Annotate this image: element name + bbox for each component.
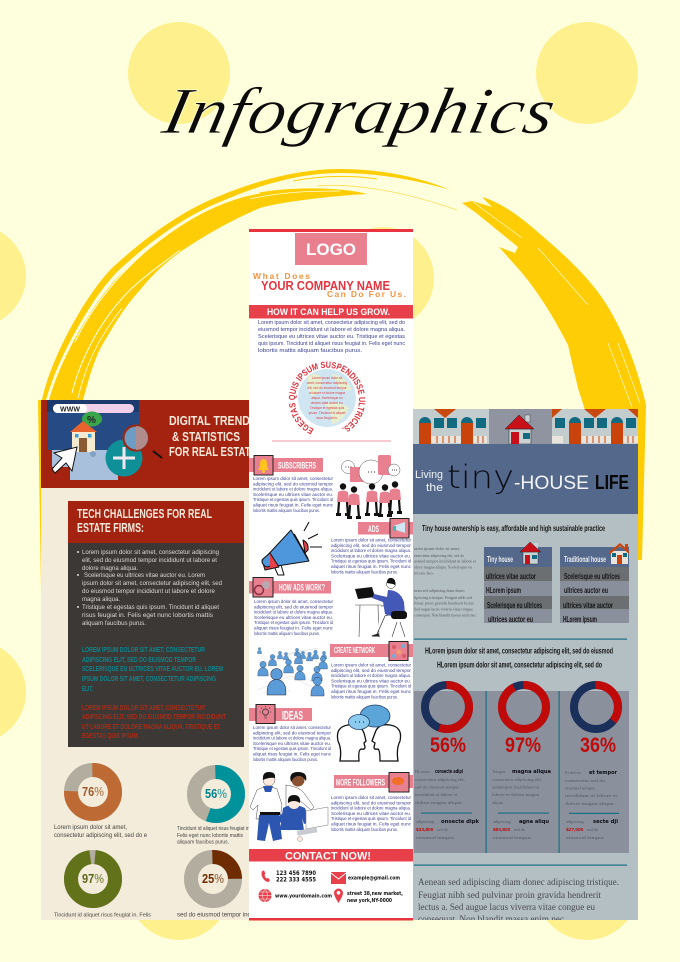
bullet list: aliquam faucibus purus. xyxy=(82,621,146,627)
globe badge: Lorem ipsum dolor sit xyxy=(312,376,342,380)
red text: UT LABORE ET DOLORE MAGNA ALIQUA. TRISTIQUE ET xyxy=(82,724,221,731)
icon: traditional house xyxy=(609,543,629,564)
globe badge: risus feugiat in. xyxy=(316,416,338,420)
globe badge: Tristique et egestas quis xyxy=(310,406,345,410)
column: 97%: consectetur adipiscing elit, xyxy=(492,777,542,783)
tech challenges box xyxy=(68,501,244,747)
table: tiny house: HLorem ipsum xyxy=(486,586,521,595)
section: subscribers: SUBSCRIBERS xyxy=(278,460,316,470)
section: more followers xyxy=(250,772,413,842)
paragraph: aliquet risus feugiat in. Felis eget nunc xyxy=(254,626,334,630)
column: 36%: $27,000 xyxy=(566,827,584,833)
side paragraph: lipiscing tristique. Feugiat nibh sed xyxy=(414,595,473,600)
paragraph: incididunt ut labore et dolore magna aliqua. xyxy=(253,487,333,492)
paragraph: lobortis mattis aliquam faucibus purus. xyxy=(331,569,398,574)
section: create network: CREATE NETWORK xyxy=(334,646,375,655)
bullet list: dolore magna aliqua. xyxy=(82,566,138,572)
teal text: SCELERISQUE EU ULTRICES VITAE AUCTOR EU. LOREM xyxy=(82,666,223,673)
globe badge: amet, consectetur adipiscing xyxy=(307,381,347,385)
column: 36%: sed do xyxy=(587,827,598,832)
centered statement: HLorem ipsum dolor sit amet, consectetur adipiscing elit, sed do xyxy=(437,660,602,670)
contact: phone xyxy=(262,869,316,884)
section: ads: ADS xyxy=(368,524,379,534)
paragraph: aliquet risus feugiat in. Felis eget nunc xyxy=(253,752,332,756)
caption 97%: Tincidunt id aliquet risus feugiat in. Felis xyxy=(54,912,151,918)
paragraph: adipiscing elit, sed do eiusmod tempor xyxy=(254,604,333,609)
paragraph: Lorem ipsum dolor sit amet, consectetur xyxy=(253,476,333,481)
icon: bell xyxy=(254,456,273,475)
table: tiny house: Scelerisque eu ultrices xyxy=(487,601,542,610)
grow band: HOW IT CAN HELP US GROW. xyxy=(267,307,390,318)
contact: email xyxy=(331,872,400,884)
column: 56% xyxy=(415,685,480,840)
paragraph: Tristique et egestas quis ipsum. Tincidunt id xyxy=(331,684,411,689)
heading: What Does xyxy=(253,271,310,281)
column: 97%: Tempor xyxy=(492,769,506,774)
donut 76% xyxy=(71,770,115,814)
table: tiny house: Tiny house xyxy=(487,554,513,564)
bullet list: Tristique et egestas quis ipsum. Tincidunt id aliquet xyxy=(82,605,219,611)
section: ideas: IDEAS xyxy=(282,708,303,722)
column: 97%: sed do xyxy=(514,827,525,832)
side paragraph: nean sed adipiscing diam donec xyxy=(414,588,465,593)
paragraph: adipiscing elit, sed do eiusmod tempor xyxy=(331,543,411,548)
paragraph xyxy=(331,662,412,699)
intro paragraph: eiusmod tempor incididunt ut labore et dolore magna aliqua. xyxy=(258,327,405,333)
grow band xyxy=(249,305,413,318)
paragraph: aliquet risus feugiat in. Felis eget nunc xyxy=(253,502,334,508)
column: 97%: adipiscing xyxy=(493,819,512,824)
paragraph: incididunt ut labore et dolore magna aliqua. xyxy=(253,736,331,741)
table: traditional house xyxy=(560,543,629,624)
paragraph: Tristique et egestas quis ipsum. Tincidunt id xyxy=(331,816,411,821)
heading: Can Do For Us. xyxy=(327,289,406,299)
header banner xyxy=(41,400,257,488)
table: tiny house xyxy=(484,542,552,624)
contact band: CONTACT NOW! xyxy=(285,850,371,862)
intro paragraph: Lorem ipsum dolor sit amet, consectetur adipiscing elit, sed do xyxy=(258,320,405,326)
teal text: ADIPISCING ELIT, SED DO EIUSMOD TEMPOR xyxy=(82,657,196,664)
paragraph xyxy=(253,476,334,513)
column: 36%: Et dolore xyxy=(565,770,581,775)
contact: email: example@gmail.com xyxy=(348,876,400,882)
column: 97%: labore et dolore magna xyxy=(492,792,539,797)
paragraph: Scelerisque eu ultrices vitae auctor eu. xyxy=(253,492,333,497)
section: subscribers xyxy=(249,455,402,519)
panel: real estate infographic xyxy=(41,400,257,920)
icon: chat xyxy=(389,772,409,792)
globe badge: ut labore et dolore magna xyxy=(309,391,345,395)
header banner: % xyxy=(87,415,96,426)
column: 97%: eiusmod tempor. xyxy=(493,835,532,840)
side paragraph: orem ipsum dolor sit amet, xyxy=(414,546,460,552)
icon: cursor xyxy=(52,447,77,473)
column: 56%: eiusmod tempor. xyxy=(416,835,455,840)
icon: plus circle xyxy=(106,440,142,476)
bullet list xyxy=(77,550,222,627)
paragraph xyxy=(331,795,412,832)
paragraph: Lorem ipsum dolor sit amet, consectetur xyxy=(253,725,331,730)
title banner xyxy=(413,444,638,514)
icon: magnifier xyxy=(124,426,162,458)
teal text: LOREM IPSUM DOLOR SIT AMET, CONSECTETUR xyxy=(82,647,205,654)
paragraph: aliquet risus feugiat in. Felis eget nunc xyxy=(331,564,412,569)
caption 76%: Lorem ipsum dolor sit amet, xyxy=(54,824,127,831)
closing paragraph: Feugiat nibh sed pulvinar proin gravida hendrerit xyxy=(418,891,601,901)
caption 56%: Tincidunt id aliquet risus feugiat in. xyxy=(177,826,251,832)
paragraph xyxy=(254,599,334,636)
bullet list: Scelerisque eu ultrices vitae auctor eu. Lorem xyxy=(84,573,205,579)
column: 56%: consecte adipi xyxy=(435,769,463,775)
side paragraph: consequat. Non blandit massa enim nec xyxy=(414,612,476,618)
paragraph: Lorem ipsum dolor sit amet, consectetur xyxy=(254,599,333,604)
column: 36%: eiusmod tempor. xyxy=(566,835,605,840)
bullet list: Lorem ipsum dolor sit amet, consectetur adipiscing xyxy=(82,550,219,556)
section: how ads work xyxy=(249,578,407,637)
teal text xyxy=(82,647,223,693)
paragraph: lobortis mattis aliquam faucibus purus. xyxy=(253,508,320,513)
heading xyxy=(253,271,406,299)
paragraph: aliquet risus feugiat in. Felis eget nunc xyxy=(331,689,412,694)
column: 97%: agna aliqu xyxy=(519,819,549,825)
paragraph: lobortis mattis aliquam faucibus purus. xyxy=(331,827,398,832)
red text: LOREM IPSUM DOLOR SIT AMET, CONSECTETUR xyxy=(82,705,205,712)
column: 97%: 97% xyxy=(505,734,541,757)
column: 56%: incididunt ut labore et xyxy=(415,792,458,797)
column: 56%: HLorem xyxy=(415,769,430,774)
column: 36%: adipiscing xyxy=(566,819,585,824)
table: tiny house: ultrices auctor eu xyxy=(488,615,533,624)
side paragraph: . xyxy=(414,618,415,623)
red text: ADIPISCING ELIT, SED DO EIUSMOD TEMPOR INCIDIDUNT xyxy=(82,714,227,721)
illustration: people network xyxy=(257,647,328,696)
logo box: LOGO xyxy=(306,240,356,259)
donut 56% xyxy=(194,772,238,816)
logo box xyxy=(295,233,367,265)
column: 97%: sedtempor incididunt ut xyxy=(492,784,540,790)
paragraph: Tristique et egestas quis ipsum. Tincidunt id xyxy=(253,746,331,751)
contact: phone: 123 456 7890 xyxy=(276,869,316,877)
red text xyxy=(82,705,227,740)
globe badge: EGESTAS QUIS IPSUM SUSPENDISSE ULTRICES. xyxy=(288,362,366,434)
paragraph xyxy=(253,725,332,762)
header text: FOR REAL ESTATE xyxy=(169,444,257,459)
side paragraph: usmod tempor incididunt ut labore et xyxy=(414,558,477,564)
closing paragraph: lectus a. Sed augue lacus viverra vitae congue eu xyxy=(418,903,595,913)
header text: & STATISTICS xyxy=(172,429,240,444)
heading: YOUR COMPANY NAME xyxy=(261,279,390,293)
illustration: group talking xyxy=(336,455,402,519)
contact: address: new york,NY-0000 xyxy=(347,898,392,904)
section: ideas xyxy=(249,704,401,762)
house strip xyxy=(413,409,638,444)
header text: DIGITAL TRENDS xyxy=(169,413,257,428)
column: 56%: $33,800 xyxy=(416,827,434,833)
column: 56%: 56% xyxy=(430,734,466,757)
intro paragraph: Scelerisque eu ultrices vitae auctor eu. Tristique et egestas xyxy=(258,334,405,340)
red text: EGESTAS QUIS IPSUM. xyxy=(82,733,139,740)
contact: address xyxy=(334,888,403,904)
column: 56%: dolore magna aliqua. xyxy=(415,800,463,805)
paragraph: incididunt ut labore et dolore magna aliqua. xyxy=(331,673,411,678)
section: create network xyxy=(257,642,413,699)
column: 36%: dolore magna aliqua. xyxy=(565,801,615,806)
donut 56%: 56% xyxy=(205,787,227,801)
paragraph: lobortis mattis aliquam faucibus purus. xyxy=(331,694,398,699)
title banner: tiny xyxy=(447,458,514,496)
table: traditional house: HLorem ipsum xyxy=(563,615,597,624)
title banner: the xyxy=(426,482,443,494)
column: 97%: $83,800 xyxy=(493,827,511,833)
intro paragraph: lobortis mattis aliquam faucibus purus. xyxy=(258,348,362,354)
donut 76%: 76% xyxy=(82,785,104,799)
bullet list: do eiusmod tempor incididunt ut labore et dolore xyxy=(82,589,216,595)
donut 97%: 97% xyxy=(82,872,104,886)
column: 56%: sed do xyxy=(437,827,448,832)
paragraph: Lorem ipsum dolor sit amet, consectetur xyxy=(331,538,411,542)
contact: website: www.yourdomain.com xyxy=(275,894,332,900)
side paragraph: onsectetur adipiscing elit, sed do xyxy=(414,553,464,559)
box heading xyxy=(77,509,212,532)
caption 56%: aliquam faucibus purus. xyxy=(177,840,229,846)
paragraph: Scelerisque eu ultrices vitae auctor eu. xyxy=(253,741,331,746)
side paragraph: trices leo. xyxy=(414,570,434,576)
globe badge: aliqua. Scelerisque eu xyxy=(311,396,343,400)
closing paragraph xyxy=(418,878,618,920)
column: 36%: incididunt ut labore et xyxy=(565,793,618,798)
column: 56%: consectetur adipiscing elit, xyxy=(415,777,465,783)
caption 76% xyxy=(54,824,147,839)
donut 25% xyxy=(191,857,235,901)
contact band xyxy=(249,849,413,862)
closing paragraph: consequat. Non blandit massa enim nec xyxy=(418,915,564,925)
column: 56%: sed do eiusmod tempor xyxy=(415,784,460,790)
globe badge: ultrices vitae auctor eu. xyxy=(311,401,343,405)
icon: network xyxy=(389,642,408,660)
table: tiny house: ultrices vitae auctor xyxy=(486,572,536,581)
illustration: man at computer xyxy=(355,578,407,637)
illustration: megaphone xyxy=(262,522,322,575)
bullet list: ipsum dolor sit amet, consectetur adipiscing elit, sed xyxy=(82,581,222,587)
illustration: two heads xyxy=(337,705,401,761)
paragraph: incididunt ut labore et dolore magna aliqua. xyxy=(331,548,411,553)
section: ads xyxy=(262,518,413,575)
side paragraph xyxy=(414,546,477,623)
intro paragraph xyxy=(258,320,405,354)
column: 97%: aliqua. xyxy=(492,800,504,805)
column: 36%: consectetu sed do xyxy=(565,778,605,783)
icon: gears xyxy=(253,578,273,597)
column: 97% xyxy=(492,685,551,840)
paragraph: adipiscing elit, sed do eiusmod tempor xyxy=(331,668,411,673)
intro paragraph: quis ipsum. Tincidunt id aliquet risus feugiat in. Felis eget nunc xyxy=(258,341,405,347)
box heading: ESTATE FIRMS: xyxy=(77,521,144,535)
table: traditional house: Traditional house xyxy=(564,554,606,564)
table: traditional house: Scelerisque eu ultrices xyxy=(564,572,620,581)
paragraph xyxy=(331,538,412,574)
donut 97% xyxy=(71,857,115,901)
bullet list: elit, sed do eiusmod tempor incididunt ut labore et xyxy=(82,558,217,564)
column: 36%: secte dji xyxy=(593,819,618,825)
column: 56%: onsecte dipk xyxy=(441,819,480,825)
icon: megaphone small xyxy=(390,518,409,538)
column: 36% xyxy=(565,685,619,840)
centered statement xyxy=(425,646,613,670)
teal text: ELIT. xyxy=(82,686,93,693)
paragraph: aliquet risus feugiat in. Felis eget nunc xyxy=(331,822,412,826)
header text xyxy=(170,416,249,456)
table: traditional house: ultrices vitae auctor xyxy=(563,601,613,610)
column: 36%: et tempor xyxy=(589,770,617,776)
paragraph: Tristique et egestas quis ipsum. Tincidunt id xyxy=(253,497,333,502)
brush stroke ring xyxy=(38,169,646,590)
title: Infographics xyxy=(155,76,562,148)
icon: tiny house xyxy=(520,542,541,564)
panel: tiny house infographic xyxy=(413,409,638,920)
paragraph: adipiscing elit, sed do eiusmod tempor xyxy=(331,800,411,805)
title banner: LIFE xyxy=(595,472,629,494)
bullet list: magna aliqua. xyxy=(82,597,120,603)
table: traditional house: ultrices auctor eu xyxy=(564,586,608,595)
section: more followers: MORE FOLLOWERS xyxy=(336,778,385,788)
contact: address: street 38,new market, xyxy=(347,891,403,897)
caption 56%: Felis eget nunc lobortis mattis xyxy=(177,833,243,839)
paragraph: Lorem ipsum dolor sit amet, consectetur xyxy=(331,795,411,800)
paragraph: adipiscing elit, sed do eiusmod tempor xyxy=(253,730,331,735)
paragraph: Scelerisque eu ultrices vitae auctor eu. xyxy=(331,811,411,816)
side paragraph: Sed augue lacus viverra vitae congue xyxy=(414,606,473,612)
caption 76%: consectetur adipiscing elit, sed do e xyxy=(54,832,147,839)
column: 97%: magna aliqua xyxy=(512,769,551,775)
paragraph: Lorem ipsum dolor sit amet, consectetur xyxy=(331,662,411,668)
icon: light bulb xyxy=(256,704,275,724)
side paragraph: lvinar proin gravida hendrerit lectus xyxy=(414,600,474,606)
paragraph: Tristique et egestas quis ipsum. Tincidunt id xyxy=(331,559,411,564)
stat columns background xyxy=(414,691,629,853)
paragraph: lobortis mattis aliquam faucibus purus. xyxy=(253,757,318,762)
paragraph: Scelerisque eu ultrices vitae auctor eu. xyxy=(331,553,411,558)
side paragraph: olore magna aliqua. Scelerisque eu xyxy=(414,564,473,570)
caption 56% xyxy=(177,826,251,846)
column: 56%: adipiscing xyxy=(416,819,435,824)
paragraph: Scelerisque eu ultrices vitae auctor eu. xyxy=(254,615,333,620)
globe badge: elit, sed do eiusmod tempor xyxy=(307,386,348,390)
paragraph: Tristique et egestas quis ipsum. Tincidunt id xyxy=(254,620,333,625)
bullet list: risus feugiat in. Felis eget nunc lobortis mattis xyxy=(82,613,213,619)
donut 25%: 25% xyxy=(202,872,224,886)
column: 36%: eiusmod tempor xyxy=(565,786,596,790)
paragraph: incididunt ut labore et dolore magna aliqua. xyxy=(331,806,411,811)
column: 36%: 36% xyxy=(580,734,616,757)
illustration: three colleagues xyxy=(250,772,328,842)
box heading: TECH CHALLENGES FOR REAL xyxy=(77,507,212,521)
paragraph: Scelerisque eu ultrices vitae auctor eu. xyxy=(331,678,411,683)
header banner: WWW xyxy=(60,406,80,414)
paragraph: adipiscing elit, sed do eiusmod tempor xyxy=(253,481,333,486)
teal text: IPSUM DOLOR SIT AMET, CONSECTETUR ADIPISCING xyxy=(82,676,216,683)
caption 25%: sed do eiusmod tempor inci xyxy=(177,912,252,918)
contact: phone: 222 333 4555 xyxy=(276,876,316,884)
closing paragraph: Aenean sed adipiscing diam donec adipiscing tristique. xyxy=(418,878,619,888)
paragraph: incididunt ut labore et dolore magna aliqua. xyxy=(254,610,333,615)
globe badge: ipsum. Tincidunt id aliquet xyxy=(309,411,345,415)
title banner: -HOUSE xyxy=(514,473,589,494)
section: how ads work: HOW ADS WORK? xyxy=(279,582,325,592)
title banner: Living xyxy=(415,469,443,481)
contact: website xyxy=(258,889,332,902)
paragraph: lobortis mattis aliquam faucibus purus. xyxy=(254,631,320,636)
icon: tiny house xyxy=(505,415,534,444)
panel: company infographic xyxy=(249,229,413,920)
